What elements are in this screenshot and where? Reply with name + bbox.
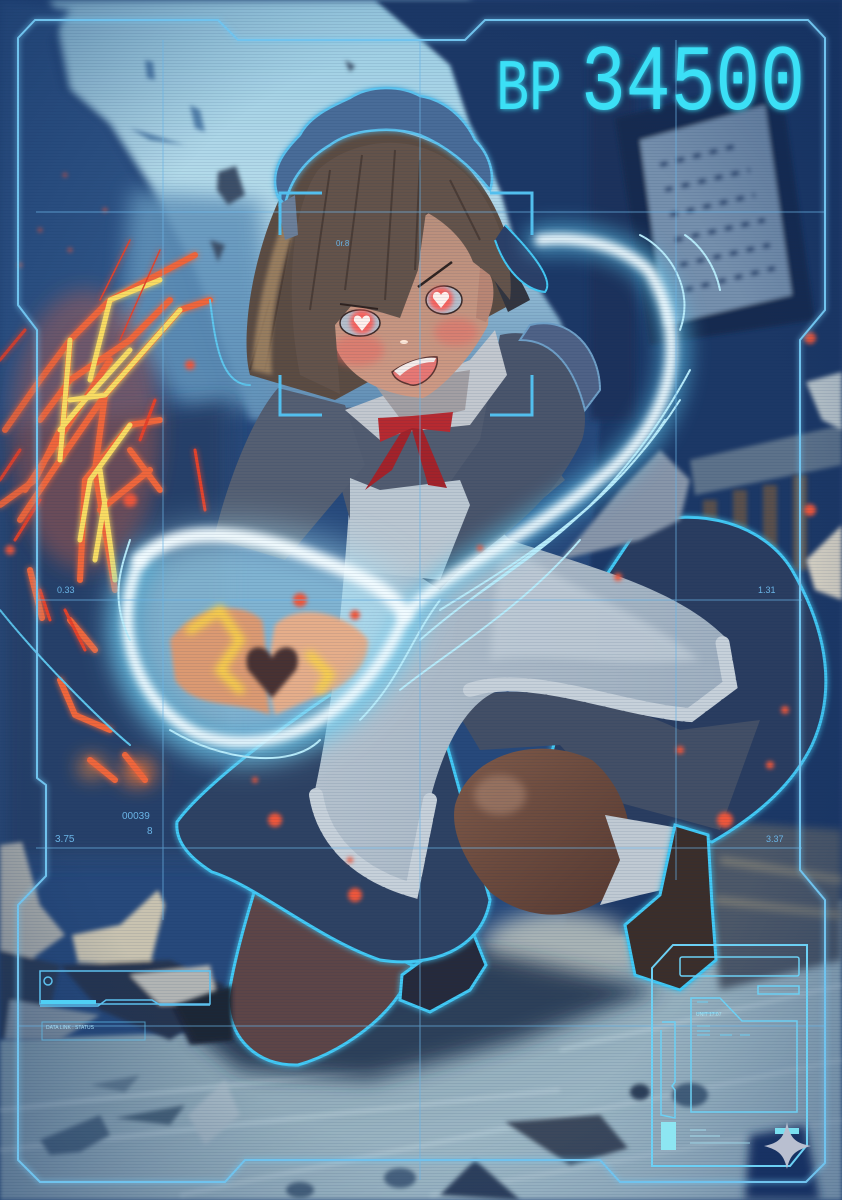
- back shoe shadow: [175, 985, 232, 1042]
- collar: [345, 330, 507, 440]
- distant haze: [120, 190, 270, 420]
- energy blur: [124, 238, 675, 747]
- neck: [375, 370, 470, 425]
- heart wisp: [140, 535, 405, 615]
- headdress: [275, 88, 492, 205]
- fringe hair: [292, 143, 511, 394]
- right rocks: [806, 372, 842, 430]
- ember glow: [10, 290, 160, 784]
- torso: [320, 395, 565, 560]
- right sleeve cuff: [560, 450, 690, 560]
- mouth: [392, 357, 437, 385]
- dark pillar: [590, 60, 635, 420]
- right ground rubble: [700, 820, 842, 990]
- right hair ribbon: [495, 225, 547, 292]
- railing: [690, 425, 842, 495]
- panel caption: UNIT 17.07: [696, 1012, 722, 1018]
- floor: [0, 900, 842, 1200]
- right shoe: [625, 825, 716, 990]
- right arm: [395, 333, 585, 590]
- floor shadow: [190, 950, 660, 1080]
- sky: [50, 0, 620, 420]
- left shoe: [400, 925, 486, 1012]
- knee highlight: [474, 775, 526, 815]
- small HUD readouts: 0.33: [57, 585, 75, 595]
- left ruined wall: [0, 0, 240, 860]
- shoulder ruffle: [520, 323, 600, 410]
- ribbon: [365, 412, 453, 490]
- front skirt: [177, 695, 490, 962]
- heart gap: [246, 647, 298, 698]
- HUD panel: lower right: [652, 945, 807, 1166]
- back skirt: [540, 517, 826, 842]
- lower left caption: DATA LINK : STATUS: [46, 1025, 95, 1031]
- panel footer: [690, 1130, 750, 1143]
- blush: [332, 334, 384, 366]
- hands forming a heart: [120, 530, 420, 753]
- left arm: [214, 388, 365, 560]
- apron: [315, 495, 730, 892]
- blue energy swirl: [0, 235, 720, 758]
- energy core: [127, 239, 671, 742]
- notice board: [615, 75, 815, 345]
- small HUD readouts: [55, 239, 784, 845]
- icon: four-point sparkle: [764, 1122, 811, 1169]
- under skirt shade: [450, 692, 760, 830]
- target brackets: [280, 193, 532, 415]
- left hand: [170, 608, 270, 715]
- lightning halo: [120, 530, 420, 753]
- apron bib: [350, 478, 470, 580]
- plank streaks: [0, 985, 842, 1195]
- HUD panel: lower left: [40, 971, 210, 1040]
- small HUD readouts: 0r.8: [336, 239, 350, 248]
- apron ruffle: [316, 640, 730, 890]
- far leg: [228, 840, 412, 1065]
- energy strands: [118, 235, 720, 758]
- small HUD readouts: 00039: [122, 811, 150, 822]
- small HUD readouts: 3.37: [766, 834, 784, 844]
- hair strands: [250, 150, 480, 370]
- hair back: [247, 129, 514, 400]
- right eye: [418, 262, 462, 314]
- small HUD readouts: 8: [147, 826, 153, 837]
- dark left interior: [0, 400, 230, 860]
- small HUD readouts: 3.75: [55, 834, 75, 845]
- fire on hands: [190, 610, 330, 690]
- red sparks: [5, 173, 816, 902]
- right hand: [269, 612, 368, 715]
- hair highlight: [252, 215, 296, 375]
- BP readout: [496, 32, 805, 138]
- face: [332, 212, 488, 398]
- left hair bow: [278, 195, 298, 240]
- near knee: [454, 749, 630, 915]
- left lights: [0, 300, 250, 745]
- right ear: [476, 268, 493, 322]
- character: [175, 88, 826, 1065]
- sock: [600, 815, 705, 905]
- flying debris: [130, 60, 355, 262]
- label: BP: BP: [496, 49, 562, 131]
- sunlit floor patch: [480, 912, 640, 988]
- left rubble: [0, 842, 232, 1045]
- small HUD readouts: 1.31: [758, 585, 776, 595]
- dark right hair: [470, 220, 530, 312]
- floor debris: [40, 1075, 820, 1200]
- apron sheen: [490, 540, 700, 663]
- fire trails: [0, 240, 210, 780]
- nose: [400, 340, 408, 344]
- right building: [375, 0, 842, 1000]
- left eye: [340, 304, 380, 336]
